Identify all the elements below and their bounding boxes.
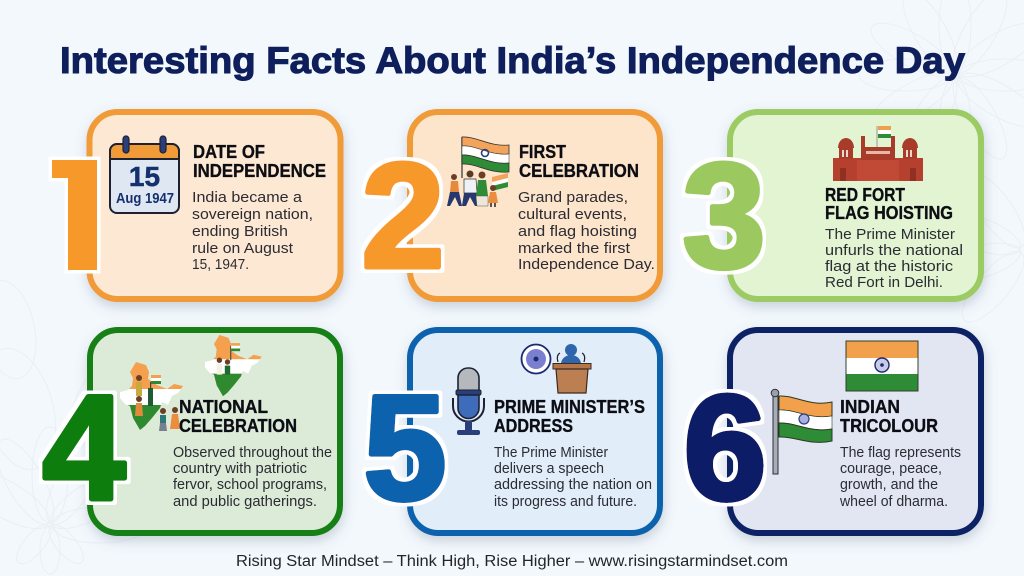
body text: courage, peace, [840,461,942,477]
body text: wheel of dharma. [839,494,948,510]
icon: calendar: Aug 1947 [116,191,174,207]
heading: NATIONAL [179,396,268,417]
decorative mandala: top right [859,0,1024,171]
body text: Observed throughout the [173,445,332,461]
heading: TRICOLOUR [840,415,938,436]
icon: waving flag on pole [771,389,832,474]
body text: ending British [192,224,288,240]
card background [730,330,981,533]
body text: marked the first [518,241,630,257]
heading [193,141,326,181]
body text: growth, and the [840,477,938,493]
body text: country with patriotic [173,461,307,477]
heading: ADDRESS [494,415,573,436]
body text: and public gatherings. [173,494,317,510]
body text: flag at the historic [825,259,953,275]
body text: and flag hoisting [518,224,637,240]
panel: first celebration [362,112,660,299]
body text: fervor, school programs, [173,477,327,493]
body text: Grand parades, [518,190,628,206]
card background [90,330,340,533]
icon: calendar: 15 [129,161,160,192]
panel: indian tricolour [684,330,981,533]
icon: india map with people, top [205,335,263,397]
body text: The Prime Minister [825,227,955,243]
decorative mandala: bottom left [0,275,157,574]
icon: red fort [833,126,923,181]
heading: INDIAN [840,396,900,417]
body text [494,445,652,510]
icon: flat flag [846,341,918,391]
heading: CELEBRATION [179,415,297,436]
decorative mandala: right edge [931,165,1024,331]
panel: national celebration [43,330,340,533]
heading [519,141,639,181]
number 6: 6 [684,364,766,531]
icon: podium speaker [553,344,591,393]
body text: India became a [192,190,302,206]
heading [494,396,645,436]
body text: rule on August [192,241,293,257]
number 3: 3 [683,132,765,299]
footer: Rising Star Mindset – Think High, Rise Higher – www.risingstarmindset.com [236,553,788,570]
heading: DATE OF [193,141,265,162]
heading: FIRST [519,141,567,162]
number 4: 4 [43,364,126,531]
body text: cultural events, [518,207,627,223]
body text [518,190,655,273]
body text: The flag represents [840,445,961,461]
body text: 15, 1947. [192,257,249,273]
heading [179,396,297,436]
title: Interesting Facts About India’s Independence Day [60,40,965,81]
icon: family with flags [447,137,509,207]
heading: RED FORT [825,184,906,205]
body text: Red Fort in Delhi. [825,275,943,291]
card background [410,112,660,299]
card background [730,112,981,299]
heading [840,396,938,436]
panel: red fort flag hoisting [683,112,981,299]
body text [825,227,963,291]
body text: its progress and future. [494,494,637,510]
body text: addressing the nation on [494,477,652,493]
card background [90,112,340,299]
body text [192,190,313,273]
heading: FLAG HOISTING [825,202,953,223]
body text [173,445,332,510]
icon: calendar [110,136,179,213]
icon: microphone [453,368,484,435]
body text [839,445,961,510]
body text: The Prime Minister [494,445,608,461]
heading: CELEBRATION [519,160,639,181]
body text: delivers a speech [494,461,604,477]
icon: ashoka chakra [522,344,550,374]
heading: INDEPENDENCE [193,160,326,181]
number 1: 1 [29,131,121,315]
body text: unfurls the national [825,243,963,259]
heading: PRIME MINISTER’S [494,396,645,417]
panel: prime minister's address [364,330,660,533]
heading [825,184,953,223]
icon: india map with people, left [120,362,184,431]
card background [410,330,660,533]
body text: Independence Day. [518,257,655,273]
panel: date of independence [29,112,340,315]
number 2: 2 [362,132,444,299]
body text: sovereign nation, [192,207,313,223]
number 5: 5 [364,364,446,531]
